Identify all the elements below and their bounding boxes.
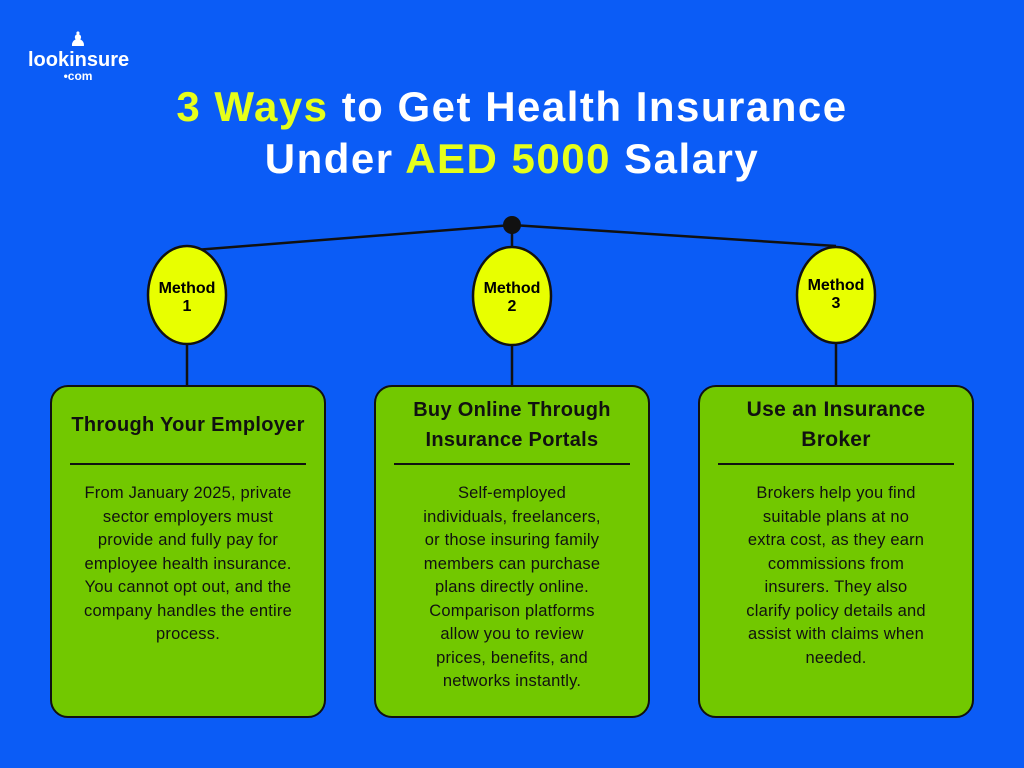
panel: online portals <box>374 385 650 718</box>
method 2: 2 <box>508 298 517 315</box>
panel: employer: provide and fully pay for <box>98 531 278 549</box>
title: 3 Ways to Get Health Insurance <box>176 83 848 130</box>
panel: online portals: Insurance Portals <box>426 429 598 451</box>
panel: broker: insurers. They also <box>765 578 907 596</box>
panel: broker: clarify policy details and <box>746 602 926 620</box>
panel: broker: suitable plans at no <box>763 508 909 526</box>
panel: online portals: networks instantly. <box>443 672 581 690</box>
title: Under AED 5000 Salary <box>265 135 759 182</box>
panel: online portals: individuals, freelancers, <box>423 508 601 526</box>
panel: broker: extra cost, as they earn <box>748 531 924 549</box>
panel: employer <box>50 385 326 718</box>
logo <box>28 29 129 83</box>
method 1 <box>148 246 226 344</box>
panel: broker: Brokers help you find <box>756 484 916 502</box>
method 1: Method <box>159 280 215 297</box>
panel: employer: Through Your Employer <box>71 414 305 436</box>
panel: broker: Broker <box>801 428 871 451</box>
panel: employer: company handles the entire <box>84 602 292 620</box>
method 2 <box>473 247 551 345</box>
panel: online portals: Self-employed <box>458 484 566 502</box>
panel: online portals: plans directly online. <box>435 578 589 596</box>
panel: broker: needed. <box>805 648 867 666</box>
panel: online portals: Comparison platforms <box>429 602 595 620</box>
panel: online portals: or those insuring family <box>425 531 599 549</box>
panel: broker: commissions from <box>768 554 904 572</box>
panel: employer: process. <box>156 625 220 643</box>
panel: online portals: members can purchase <box>424 554 600 572</box>
panel: employer: employee health insurance. <box>84 554 292 572</box>
panel: broker: Use an Insurance <box>747 398 925 421</box>
method 3 <box>797 247 875 343</box>
method 2: Method <box>484 280 540 297</box>
panel: broker: assist with claims when <box>748 625 924 643</box>
method 3: Method <box>808 277 864 294</box>
method 3: 3 <box>832 295 841 312</box>
icon: dino: ♟ <box>69 29 87 51</box>
logo: •com <box>64 69 92 83</box>
panel: employer: You cannot opt out, and the <box>85 578 291 596</box>
panel: employer: From January 2025, private <box>85 484 291 502</box>
method 1: 1 <box>183 298 192 315</box>
title <box>176 83 848 182</box>
panel: online portals: prices, benefits, and <box>436 648 588 666</box>
panel: broker <box>698 385 974 718</box>
panel: employer: sector employers must <box>103 508 273 526</box>
panel: online portals: allow you to review <box>440 625 584 643</box>
logo: lookinsure <box>28 49 129 71</box>
panel: online portals: Buy Online Through <box>413 399 611 421</box>
